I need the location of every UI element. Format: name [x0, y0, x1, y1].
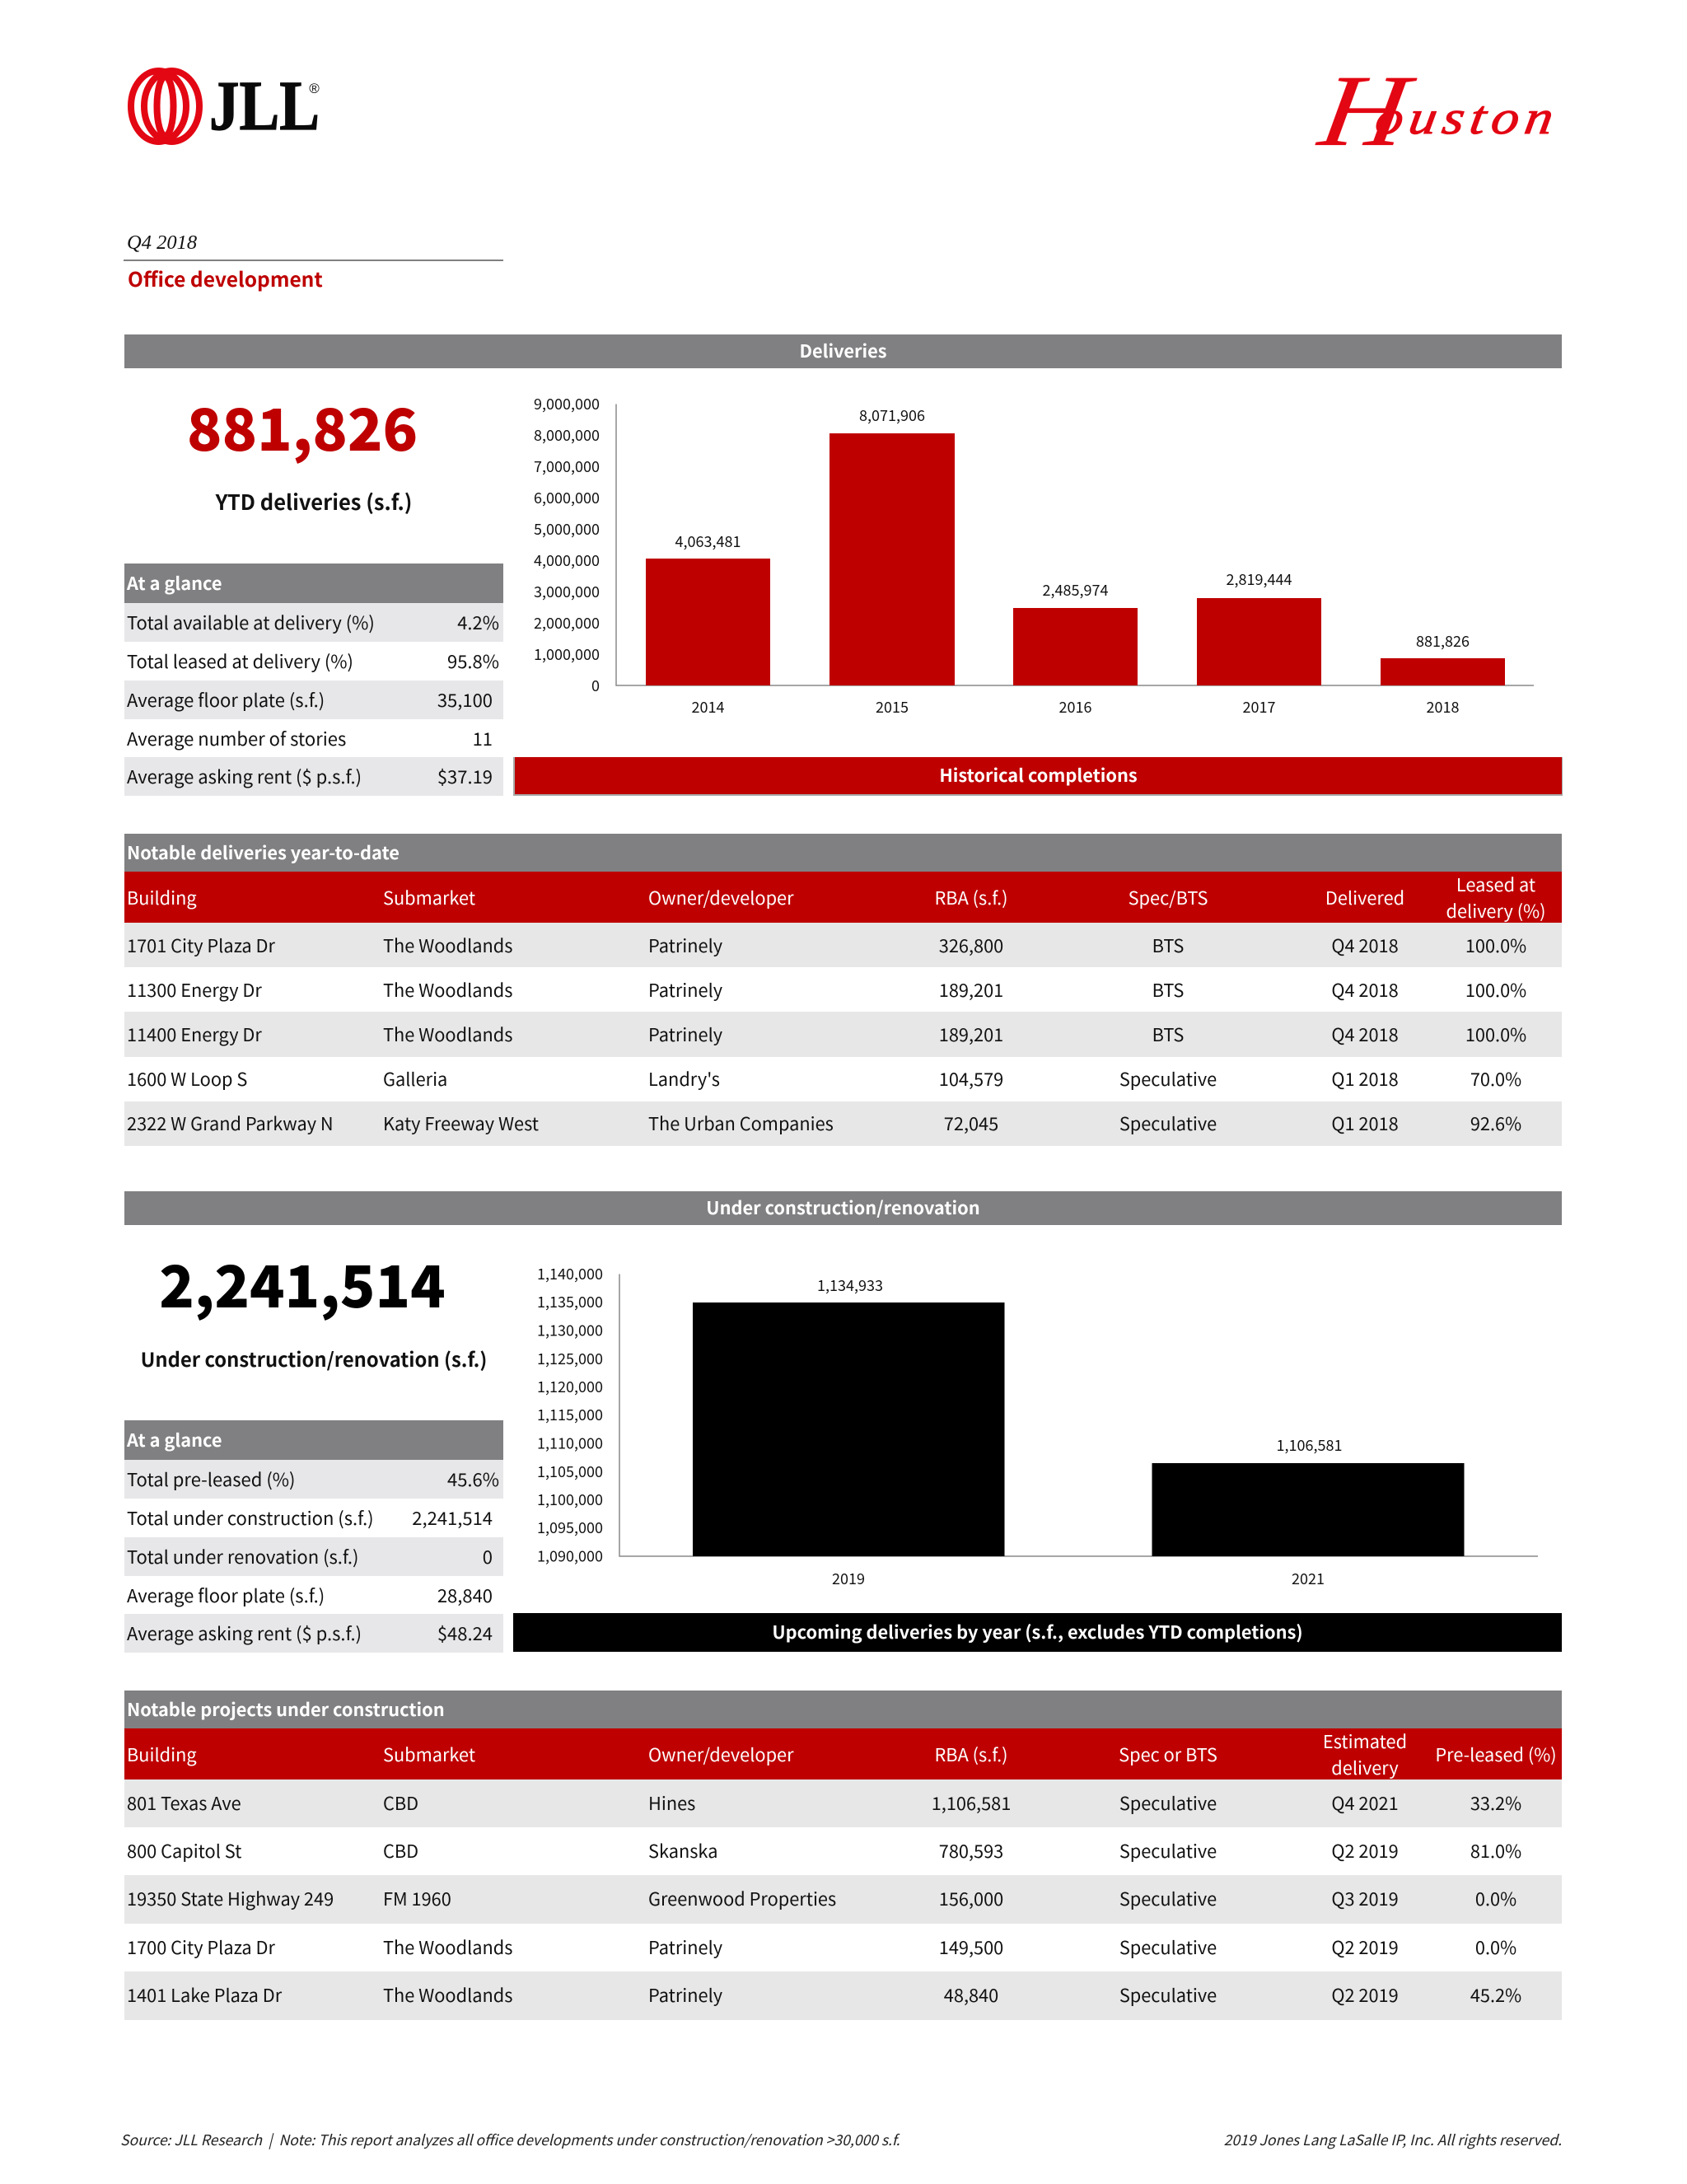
icon: interlocking rings [131, 71, 199, 142]
section header: Under construction/renovation: Under construction/renovation [706, 1195, 980, 1220]
category labels: 2016 [1059, 696, 1091, 718]
category labels: 2018 [1427, 696, 1459, 718]
row: 11400 Energy Dr [124, 1012, 1562, 1057]
row: 1700 City Plaza Dr: 149,500 [939, 1934, 1003, 1960]
logo wordmark: ® [309, 81, 320, 96]
row: 19350 State Highway 249: 19350 State Highway 249 [127, 1886, 334, 1911]
axes [619, 1274, 1538, 1556]
y axis labels: 1,115,000 [537, 1404, 603, 1425]
panel: at a glance, deliveries [124, 564, 503, 796]
bar chart: upcoming deliveries [537, 1263, 1538, 1589]
row: 800 Capitol St [127, 1838, 1521, 1864]
row: total available [124, 603, 503, 642]
row: 19350 State Highway 249: FM 1960 [383, 1886, 451, 1911]
row: 19350 State Highway 249: 0.0% [1475, 1886, 1516, 1911]
y axis labels: 9,000,000 [534, 393, 600, 414]
caption: Historical completions: Historical completions [939, 762, 1138, 788]
row: 801 Texas Ave: Speculative [1119, 1790, 1217, 1816]
y axis labels: 1,125,000 [537, 1348, 603, 1369]
y axis labels [534, 393, 600, 696]
row: 1701 City Plaza Dr: 1701 City Plaza Dr [127, 933, 275, 958]
stat label: under construction: Under construction/renovation (s.f.) [141, 1344, 487, 1373]
y axis labels: 1,000,000 [534, 643, 600, 665]
bar chart: historical completions [534, 393, 1534, 718]
row: total pre-leased [124, 1460, 503, 1499]
row: floor plate: 35,100 [437, 685, 493, 712]
row: 11300 Energy Dr [127, 977, 1526, 1003]
row: 11300 Energy Dr: Patrinely [648, 977, 722, 1003]
row: floor plate [127, 1582, 493, 1608]
y axis labels: 1,135,000 [537, 1291, 603, 1312]
row: 801 Texas Ave: 33.2% [1470, 1790, 1521, 1816]
row: total under renovation: 0 [483, 1542, 493, 1569]
row: 1700 City Plaza Dr [127, 1934, 1516, 1960]
table header: Building [127, 885, 197, 910]
value labels [817, 1274, 1342, 1456]
row: 19350 State Highway 249: Q3 2019 [1331, 1886, 1399, 1911]
category labels: 2019 [832, 1568, 865, 1589]
row: 11400 Energy Dr: 100.0% [1465, 1022, 1526, 1047]
row: 1700 City Plaza Dr: The Woodlands [383, 1934, 512, 1960]
row: 800 Capitol St: CBD [383, 1838, 418, 1864]
heading: at a glance: At a glance [127, 1427, 222, 1452]
row: 11300 Energy Dr: The Woodlands [383, 977, 512, 1003]
row: 19350 State Highway 249 [124, 1875, 1562, 1924]
row: 11400 Energy Dr: 189,201 [939, 1022, 1003, 1047]
row: 2322 W Grand Parkway N: 72,045 [944, 1111, 998, 1136]
title: Office development: Office development [128, 264, 323, 293]
row: 1401 Lake Plaza Dr: Q2 2019 [1331, 1982, 1399, 2008]
y axis labels [537, 1263, 603, 1567]
table header: delivery (%) [1446, 898, 1545, 924]
logo: JLL [128, 66, 320, 145]
row: floor plate: Average floor plate (s.f.) [127, 1582, 325, 1608]
row: 801 Texas Ave: 801 Texas Ave [127, 1790, 241, 1816]
row: total available: Total available at delivery (%) [127, 608, 375, 634]
y axis labels: 0 [591, 675, 600, 696]
row: 19350 State Highway 249: Greenwood Properties [648, 1886, 836, 1911]
table header: Owner/developer [648, 1742, 794, 1767]
table header: Estimated [1323, 1728, 1407, 1754]
row: floor plate: 28,840 [437, 1582, 493, 1608]
row: 11400 Energy Dr: The Woodlands [383, 1022, 512, 1047]
row: 11400 Energy Dr: 11400 Energy Dr [127, 1022, 262, 1047]
row: 2322 W Grand Parkway N: Katy Freeway West [383, 1111, 539, 1136]
row: 2322 W Grand Parkway N: Q1 2018 [1331, 1111, 1399, 1136]
y axis labels: 8,000,000 [534, 424, 600, 446]
row: 2322 W Grand Parkway N: 2322 W Grand Parkway N [127, 1111, 334, 1136]
row: total available: 4.2% [457, 608, 499, 634]
table title: Notable projects under construction [127, 1696, 445, 1722]
value labels: 2,485,974 [1043, 579, 1108, 601]
table title: Notable deliveries year-to-date [127, 839, 400, 865]
y axis labels: 1,120,000 [537, 1376, 603, 1397]
y axis labels: 1,140,000 [537, 1263, 603, 1284]
row: 1401 Lake Plaza Dr: 45.2% [1470, 1982, 1521, 2008]
row: 2322 W Grand Parkway N: 92.6% [1470, 1111, 1521, 1136]
stat: under construction: 2,241,514 [159, 1242, 446, 1325]
row: 800 Capitol St: Skanska [648, 1838, 717, 1864]
heading: at a glance [124, 564, 503, 603]
row: 1600 W Loop S: Landry's [648, 1066, 720, 1092]
title rule [124, 260, 503, 261]
row: 801 Texas Ave: CBD [383, 1790, 418, 1816]
caption: Historical completions [513, 757, 1563, 796]
wordmark: Houston [1311, 54, 1563, 168]
table header: Leased at [1456, 872, 1535, 897]
row: stories: 11 [473, 725, 493, 751]
bars [693, 1302, 1465, 1556]
y axis labels: 1,095,000 [537, 1517, 603, 1538]
row: 1701 City Plaza Dr [124, 923, 1562, 967]
row: total under renovation: Total under renovation (s.f.) [127, 1542, 358, 1569]
row: 11300 Energy Dr: 100.0% [1465, 977, 1526, 1003]
category labels [832, 1568, 1325, 1589]
row: 1401 Lake Plaza Dr: The Woodlands [383, 1982, 512, 2008]
row: 11300 Energy Dr: BTS [1152, 977, 1184, 1003]
table header [124, 872, 1562, 923]
row: 1701 City Plaza Dr: 100.0% [1465, 933, 1526, 958]
row: 800 Capitol St: 780,593 [939, 1838, 1003, 1864]
value labels: 1,134,933 [817, 1274, 883, 1296]
y axis labels: 1,105,000 [537, 1461, 603, 1482]
row: asking rent [124, 1614, 503, 1653]
y axis labels: 3,000,000 [534, 581, 600, 602]
caption: Upcoming deliveries by year [513, 1613, 1562, 1652]
wordmark: Houston: ouston [1372, 91, 1563, 144]
row: 1600 W Loop S [127, 1066, 1521, 1092]
row: 1401 Lake Plaza Dr: 48,840 [944, 1982, 998, 2008]
table header [124, 1728, 1562, 1779]
row: 1600 W Loop S: 104,579 [939, 1066, 1003, 1092]
row: 1600 W Loop S: Galleria [383, 1066, 447, 1092]
row: 11400 Energy Dr: BTS [1152, 1022, 1184, 1047]
category labels: 2015 [876, 696, 909, 718]
row: total under construction: Total under construction (s.f.) [127, 1504, 374, 1531]
row: 800 Capitol St: Speculative [1119, 1838, 1217, 1864]
footer: copyright: 2019 Jones Lang LaSalle IP, Inc. All rights reserved. [1224, 2130, 1562, 2150]
y axis labels: 5,000,000 [534, 518, 600, 540]
section header: Under construction/renovation [124, 1191, 1562, 1225]
heading: at a glance [124, 1420, 503, 1460]
table: notable deliveries year-to-date [124, 834, 1562, 1146]
y axis labels: 4,000,000 [534, 550, 600, 571]
value labels [675, 405, 1470, 652]
table header: Spec or BTS [1119, 1742, 1217, 1767]
row: total leased: Total leased at delivery (%) [127, 648, 353, 674]
panel: at a glance, under construction [124, 1420, 503, 1653]
row: asking rent: $37.19 [437, 763, 493, 789]
row: 801 Texas Ave: Q4 2021 [1331, 1790, 1399, 1816]
row: 19350 State Highway 249: 156,000 [939, 1886, 1003, 1911]
category labels: 2014 [692, 696, 724, 718]
row: 11400 Energy Dr: Patrinely [648, 1022, 722, 1047]
row: 1700 City Plaza Dr: 0.0% [1475, 1934, 1516, 1960]
row: total under construction: 2,241,514 [412, 1504, 493, 1531]
row: total pre-leased: Total pre-leased (%) [127, 1465, 295, 1491]
row: 1701 City Plaza Dr: Patrinely [648, 933, 722, 958]
row: total under construction [127, 1504, 493, 1531]
row: 1701 City Plaza Dr: 326,800 [939, 933, 1003, 958]
axes [616, 404, 1534, 685]
row: 1401 Lake Plaza Dr: 1401 Lake Plaza Dr [127, 1982, 282, 2008]
stat: YTD deliveries: 881,826 [187, 385, 418, 468]
row: 1401 Lake Plaza Dr: Patrinely [648, 1982, 722, 2008]
table header: RBA (s.f.) [934, 1742, 1008, 1767]
value labels: 1,106,581 [1277, 1434, 1342, 1456]
table header: Building [127, 1742, 197, 1767]
row: 19350 State Highway 249: Speculative [1119, 1886, 1217, 1911]
table header: Delivered [1325, 885, 1404, 910]
row: 800 Capitol St: Q2 2019 [1331, 1838, 1399, 1864]
value labels: 4,063,481 [675, 531, 741, 552]
row: asking rent [124, 757, 503, 796]
table header: Submarket [383, 885, 475, 910]
value labels: 8,071,906 [859, 405, 925, 426]
table header: delivery [1331, 1755, 1399, 1780]
row: 11300 Energy Dr: 11300 Energy Dr [127, 977, 262, 1003]
table title [124, 1691, 1562, 1728]
row: 11300 Energy Dr: 189,201 [939, 977, 1003, 1003]
row: 1600 W Loop S: Q1 2018 [1331, 1066, 1399, 1092]
section header: Deliveries [124, 334, 1562, 368]
row: 1600 W Loop S: 1600 W Loop S [127, 1066, 247, 1092]
caption: Upcoming deliveries by year: Upcoming deliveries by year (s.f., excludes YTD completions) [772, 1619, 1303, 1644]
y axis labels: 1,110,000 [537, 1432, 603, 1453]
row: 1401 Lake Plaza Dr [124, 1971, 1562, 2020]
table header: Pre-leased (%) [1435, 1742, 1557, 1767]
row: 1700 City Plaza Dr: 1700 City Plaza Dr [127, 1934, 275, 1960]
value labels: 881,826 [1416, 630, 1470, 652]
row: total pre-leased: 45.6% [447, 1465, 499, 1491]
row: 800 Capitol St: 800 Capitol St [127, 1838, 241, 1864]
table header: RBA (s.f.) [934, 885, 1008, 910]
row: 11400 Energy Dr: Q4 2018 [1331, 1022, 1399, 1047]
row: 801 Texas Ave: Hines [648, 1790, 695, 1816]
row: asking rent: Average asking rent ($ p.s.f.) [127, 763, 362, 789]
table title [124, 834, 1562, 872]
row: 1700 City Plaza Dr: Speculative [1119, 1934, 1217, 1960]
date: Q4 2018: Q4 2018 [127, 231, 197, 254]
row: 1600 W Loop S: Speculative [1119, 1066, 1217, 1092]
row: floor plate [124, 680, 503, 719]
row: 1600 W Loop S: 70.0% [1470, 1066, 1521, 1092]
category labels: 2017 [1243, 696, 1275, 718]
row: 800 Capitol St: 81.0% [1470, 1838, 1521, 1864]
row: stories: Average number of stories [127, 725, 346, 751]
row: asking rent: Average asking rent ($ p.s.f.) [127, 1620, 362, 1646]
row: 1700 City Plaza Dr: Q2 2019 [1331, 1934, 1399, 1960]
row: 801 Texas Ave [124, 1779, 1562, 1827]
bars [646, 433, 1505, 685]
row: stories [127, 725, 493, 751]
row: 1700 City Plaza Dr: Patrinely [648, 1934, 722, 1960]
heading: at a glance: At a glance [127, 570, 222, 596]
wordmark: Houston: H [1311, 54, 1422, 168]
row: 801 Texas Ave: 1,106,581 [932, 1790, 1011, 1816]
table header: Spec/BTS [1129, 885, 1208, 910]
y axis labels: 7,000,000 [534, 456, 600, 477]
footer: source note: Source: JLL Research | Note: This report analyzes all office developments under construction/renovation >30,000 s.f. [120, 2130, 900, 2150]
row: 1701 City Plaza Dr: BTS [1152, 933, 1184, 958]
row: 2322 W Grand Parkway N: The Urban Companies [648, 1111, 834, 1136]
row: 2322 W Grand Parkway N: Speculative [1119, 1111, 1217, 1136]
row: floor plate: Average floor plate (s.f.) [127, 685, 325, 712]
table header: Submarket [383, 1742, 475, 1767]
row: total leased: 95.8% [447, 648, 499, 674]
logo wordmark: JLL [209, 66, 320, 145]
y axis labels: 2,000,000 [534, 612, 600, 634]
category labels: 2021 [1292, 1568, 1325, 1589]
y axis labels: 1,090,000 [537, 1546, 603, 1567]
row: 2322 W Grand Parkway N [124, 1101, 1562, 1146]
y axis labels: 6,000,000 [534, 487, 600, 508]
row: 1701 City Plaza Dr: The Woodlands [383, 933, 512, 958]
row: 11300 Energy Dr: Q4 2018 [1331, 977, 1399, 1003]
category labels [692, 696, 1459, 718]
section header: Deliveries: Deliveries [799, 338, 887, 363]
value labels: 2,819,444 [1227, 568, 1292, 590]
row: 1701 City Plaza Dr: Q4 2018 [1331, 933, 1399, 958]
row: total leased [127, 648, 499, 674]
y axis labels: 1,100,000 [537, 1489, 603, 1510]
table: notable projects under construction [124, 1691, 1562, 2020]
row: total under renovation [124, 1537, 503, 1576]
row: asking rent: $48.24 [437, 1620, 493, 1646]
row: 1401 Lake Plaza Dr: Speculative [1119, 1982, 1217, 2008]
y axis labels: 1,130,000 [537, 1320, 603, 1341]
stat label: YTD deliveries: YTD deliveries (s.f.) [216, 486, 412, 517]
table header: Owner/developer [648, 885, 794, 910]
